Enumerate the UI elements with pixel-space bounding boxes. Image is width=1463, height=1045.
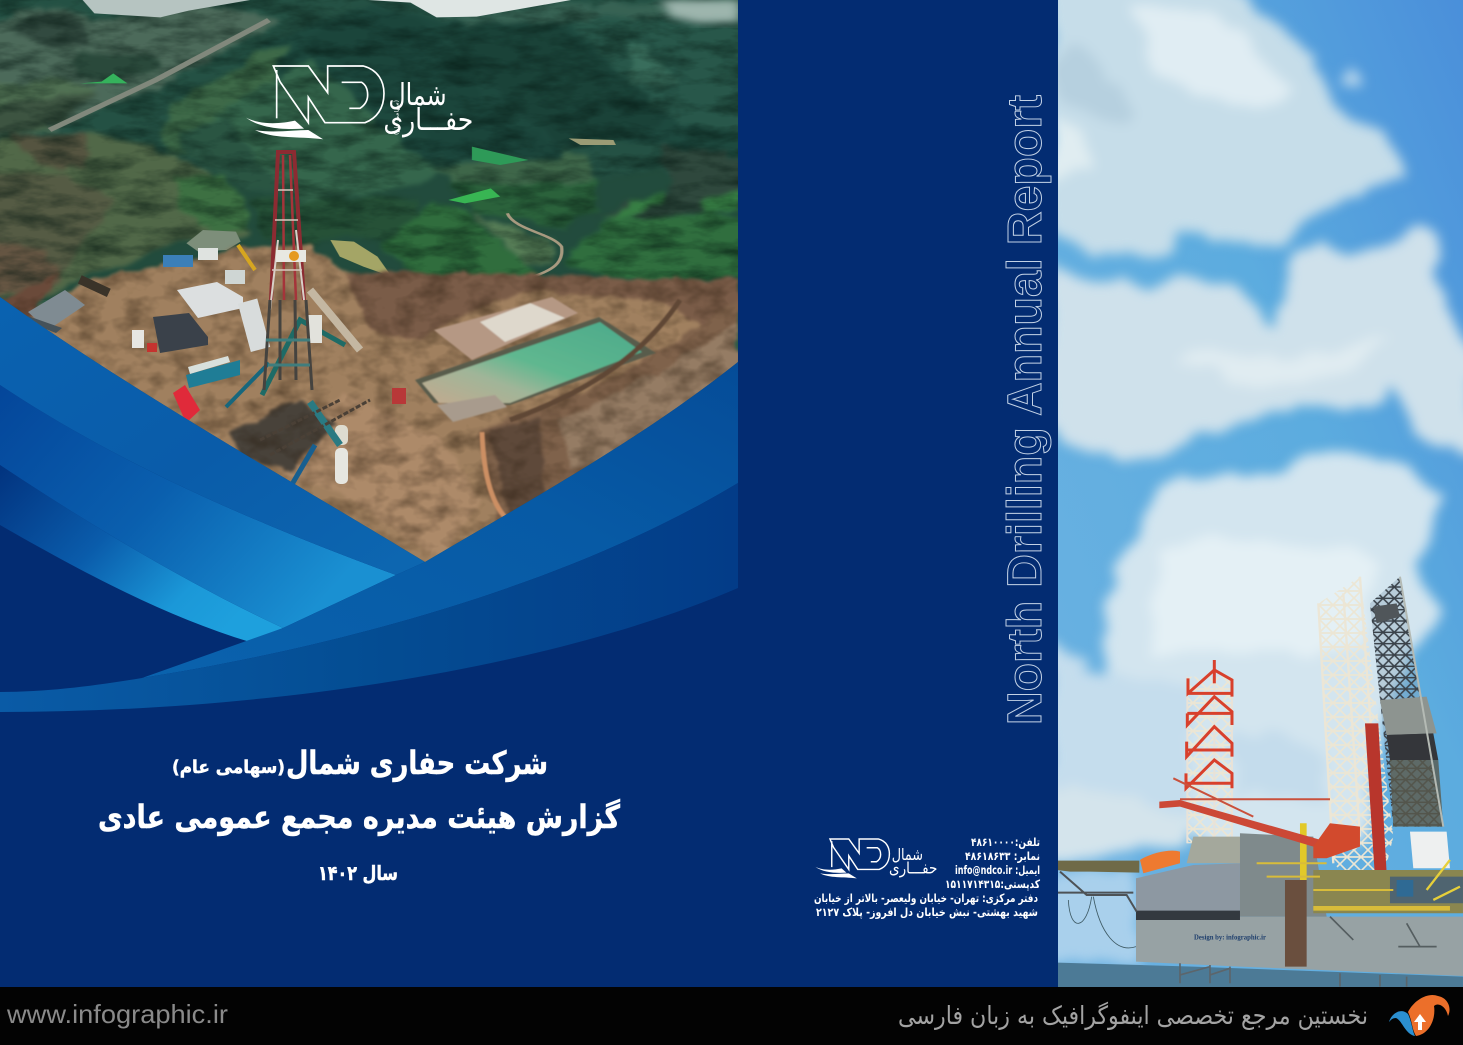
small logo mark bbox=[830, 839, 889, 869]
watermark credit: Design by: infographic.ir bbox=[1194, 933, 1266, 941]
ribbon: bottom sweeping band bbox=[0, 483, 738, 712]
equipment bbox=[28, 245, 406, 498]
ground bbox=[0, 245, 738, 570]
title: year: سال ۱۴۰۲ bbox=[318, 861, 398, 885]
photo: drilling site in the mountains bbox=[0, 0, 764, 570]
clouds bbox=[1047, 0, 1463, 967]
title: company type: (سهامی عام) bbox=[172, 757, 285, 778]
sea bbox=[1058, 962, 1463, 987]
phone: تلفن:۴۸۶۱۰۰۰۰ bbox=[971, 835, 1040, 849]
photo: jack-up rig against the sky bbox=[1047, 0, 1463, 990]
postal code: کدپستی:۱۵۱۱۷۱۴۳۱۵ bbox=[945, 877, 1040, 891]
blue ribbon shapes bbox=[0, 297, 738, 712]
mountains bbox=[0, 0, 764, 300]
leg with red bracing bbox=[1186, 660, 1232, 843]
mountain highlights, road and clouds bbox=[50, 0, 740, 277]
title: report subject: گزارش هیئت مدیره مجمع عمومی عادی bbox=[98, 798, 620, 836]
footer tagline: نخستین مرجع تخصصی اینفوگرافیک به زبان فارسی bbox=[898, 1001, 1368, 1031]
helideck bbox=[1057, 861, 1139, 873]
icon: infographic flame logo bbox=[1389, 995, 1450, 1036]
title: company name: شرکت حفاری شمال bbox=[286, 744, 548, 782]
derrick bbox=[264, 152, 312, 390]
rig structure bbox=[1057, 577, 1463, 990]
ribbon: right upper band bbox=[142, 362, 738, 678]
title block bbox=[98, 744, 620, 885]
logo mark outline bbox=[273, 66, 384, 123]
sky bbox=[1058, 0, 1463, 987]
logo wordmark: small vertical note: (سهامی عام) bbox=[393, 100, 400, 135]
fax: نمابر: ۴۸۶۱۸۶۳۳ bbox=[965, 849, 1040, 863]
logo wordmark: upper line: شمال bbox=[388, 78, 447, 113]
reservoir pond bbox=[415, 297, 680, 522]
address line 2: شهید بهشتی- نبش خیابان دل افروز- پلاک ۲۱۲۷ bbox=[816, 905, 1038, 920]
small logo wordmark: upper line: شمال bbox=[892, 845, 923, 864]
main leg lattice bbox=[1318, 577, 1393, 907]
white module bbox=[1410, 832, 1450, 868]
contact details bbox=[814, 835, 1040, 920]
logo waves bbox=[246, 118, 323, 139]
legs below hull bbox=[1180, 963, 1407, 987]
ribbon: left middle band bbox=[0, 385, 396, 628]
lifeboat bbox=[1140, 851, 1180, 873]
footer bar bbox=[0, 987, 1463, 1045]
derrick tower bbox=[1370, 577, 1443, 827]
ribbon: left lower bright band bbox=[0, 465, 283, 642]
ribbon: left top band bbox=[0, 297, 425, 575]
mountain shade bbox=[0, 0, 738, 300]
logo: white NDC mark on photo bbox=[246, 66, 473, 139]
small logo waves bbox=[815, 867, 857, 878]
footer url: www.infographic.ir bbox=[6, 999, 228, 1029]
email: ایمیل: info@ndco.ir bbox=[955, 863, 1040, 877]
crane boom bbox=[1159, 800, 1327, 847]
small logo wordmark: lower line: حفـــاری bbox=[889, 858, 937, 878]
logo wordmark: lower line: حفـــاری bbox=[383, 103, 473, 138]
spine title: North Drilling Annual Report: North Drilling Annual Report bbox=[999, 95, 1052, 725]
small logo on spine bbox=[815, 839, 937, 878]
hull bbox=[1136, 917, 1463, 976]
address line 1: دفتر مرکزی: تهران- خیابان ولیعصر- بالاتر از خیابان bbox=[814, 891, 1038, 906]
